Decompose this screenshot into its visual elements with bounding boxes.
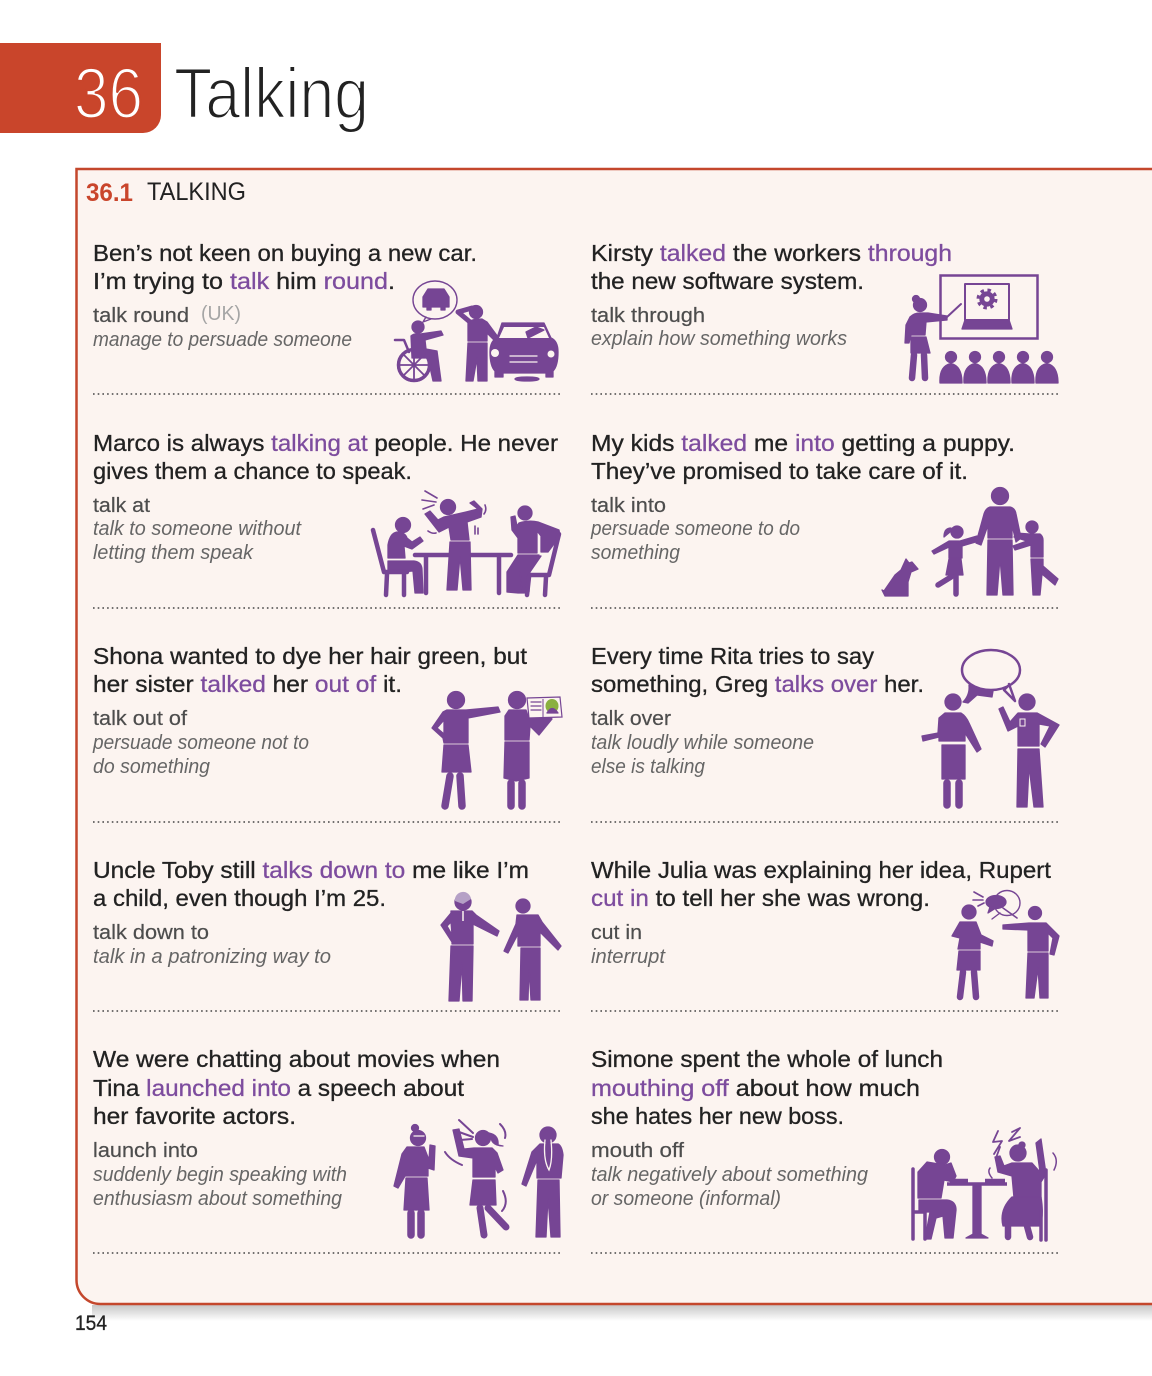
entry: talk out of: persuade someone not to <box>92 732 309 754</box>
entry: talk round: talk round <box>93 305 189 327</box>
section heading: TALKING <box>147 178 246 206</box>
entry: launch into: Tina launched into a speech about <box>93 1075 465 1101</box>
entry: talk round: (UK) <box>201 303 241 325</box>
entry: launch into: launch into <box>93 1140 198 1162</box>
entry: talk down to: Uncle Toby still talks down to me like I’m <box>93 857 529 883</box>
entry: talk into <box>590 430 1015 564</box>
entry: mouth off: mouth off <box>591 1140 684 1162</box>
entry: talk down to <box>93 857 529 968</box>
chapter number tab: 36 <box>74 55 143 134</box>
entry: talk through: Kirsty talked the workers through <box>591 240 952 266</box>
entry: talk round <box>93 240 477 351</box>
entry: mouth off: talk negatively about something <box>591 1164 868 1186</box>
page number: 154 <box>75 1312 107 1335</box>
entry: talk at: Marco is always talking at people. He never <box>93 430 558 456</box>
divider <box>591 607 1059 609</box>
entry: launch into: suddenly begin speaking with <box>93 1164 347 1186</box>
entry: talk down to: talk in a patronizing way to <box>93 946 331 968</box>
icon: older man talking down to younger man <box>441 892 561 1001</box>
divider <box>93 393 561 395</box>
entry: mouth off: Simone spent the whole of lunch <box>591 1046 943 1072</box>
divider <box>93 1252 561 1254</box>
icon: woman pointing at sister holding hair book <box>432 692 562 806</box>
entry: talk over: Every time Rita tries to say <box>591 643 875 669</box>
entry: talk out of: do something <box>93 756 210 778</box>
entry: talk at: gives them a chance to speak. <box>93 458 412 484</box>
entry: talk down to: a child, even though I’m 25. <box>93 885 386 911</box>
divider <box>591 1010 1059 1012</box>
icon: man cutting in on woman speaking <box>952 890 1059 998</box>
entry: talk into: They’ve promised to take care of it. <box>591 458 968 484</box>
title: Talking <box>174 55 369 134</box>
entry: cut in <box>591 857 1052 968</box>
entry: launch into <box>93 1046 500 1210</box>
entry: talk over: something, Greg talks over her. <box>591 671 924 697</box>
entry: talk out of: Shona wanted to dye her hair green, but <box>93 643 528 669</box>
panel shadow <box>92 1305 1152 1321</box>
entry: cut in: interrupt <box>591 946 666 968</box>
entry: mouth off: mouthing off about how much <box>591 1075 920 1101</box>
entry: talk into: talk into <box>591 495 666 517</box>
entry: cut in: While Julia was explaining her idea, Rupert <box>591 857 1052 883</box>
entry: talk out of: her sister talked her out of it. <box>93 671 402 697</box>
entry: launch into: her favorite actors. <box>93 1103 296 1129</box>
icon: woman launching into speech between two listeners <box>394 1120 563 1237</box>
entry: talk through: explain how something works <box>591 328 847 350</box>
entry: talk over: else is talking <box>591 756 705 778</box>
entry: talk at: letting them speak <box>93 542 254 564</box>
icon: adult with two pleading children and dog <box>882 488 1058 596</box>
icon: man in wheelchair and man by damaged car <box>395 281 558 381</box>
entry: mouth off: she hates her new boss. <box>591 1103 844 1129</box>
divider <box>591 393 1059 395</box>
entry: launch into: enthusiasm about something <box>93 1188 342 1210</box>
entry: talk over <box>591 643 924 778</box>
divider <box>93 607 561 609</box>
entry: talk round: Ben’s not keen on buying a new car. <box>93 240 477 266</box>
entry: talk down to: talk down to <box>93 922 209 944</box>
entry: talk round: manage to persuade someone <box>93 329 352 351</box>
icon: man talking at two seated people <box>373 491 560 595</box>
divider <box>93 1010 561 1012</box>
entry: talk at <box>93 430 558 564</box>
entry: mouth off <box>591 1046 943 1210</box>
divider <box>93 821 561 823</box>
entry: talk into: persuade someone to do <box>590 518 800 540</box>
entry: talk out of <box>92 643 528 778</box>
chapter number tab <box>0 43 161 134</box>
icon: man talking over woman with speech bubble <box>922 650 1059 807</box>
entry: talk at: talk to someone without <box>93 518 302 540</box>
divider <box>591 821 1059 823</box>
entry: talk over: talk loudly while someone <box>591 732 814 754</box>
icon: two people at cafe table, one mouthing off <box>913 1128 1056 1240</box>
entry: mouth off: or someone (informal) <box>591 1188 781 1210</box>
entry: talk into: something <box>591 542 680 564</box>
entry: launch into: We were chatting about movies when <box>93 1046 500 1072</box>
section heading: 36.1 <box>86 179 133 207</box>
entry: talk through <box>591 240 952 350</box>
entry: talk through: the new software system. <box>591 268 864 294</box>
entry: talk round: I’m trying to talk him round. <box>93 268 395 294</box>
icon: presenter with laptop screen and audience <box>905 276 1058 383</box>
entry: talk over: talk over <box>591 708 671 730</box>
entry: cut in: cut in to tell her she was wrong. <box>591 885 930 911</box>
section heading <box>86 178 246 207</box>
entry: talk into: My kids talked me into getting a puppy. <box>591 430 1015 456</box>
entry: talk through: talk through <box>591 305 705 327</box>
divider <box>591 1252 1059 1254</box>
entry: talk out of: talk out of <box>93 708 187 730</box>
entry: talk at: talk at <box>93 495 150 517</box>
panel: talking <box>76 169 1152 1304</box>
entry: cut in: cut in <box>591 922 642 944</box>
